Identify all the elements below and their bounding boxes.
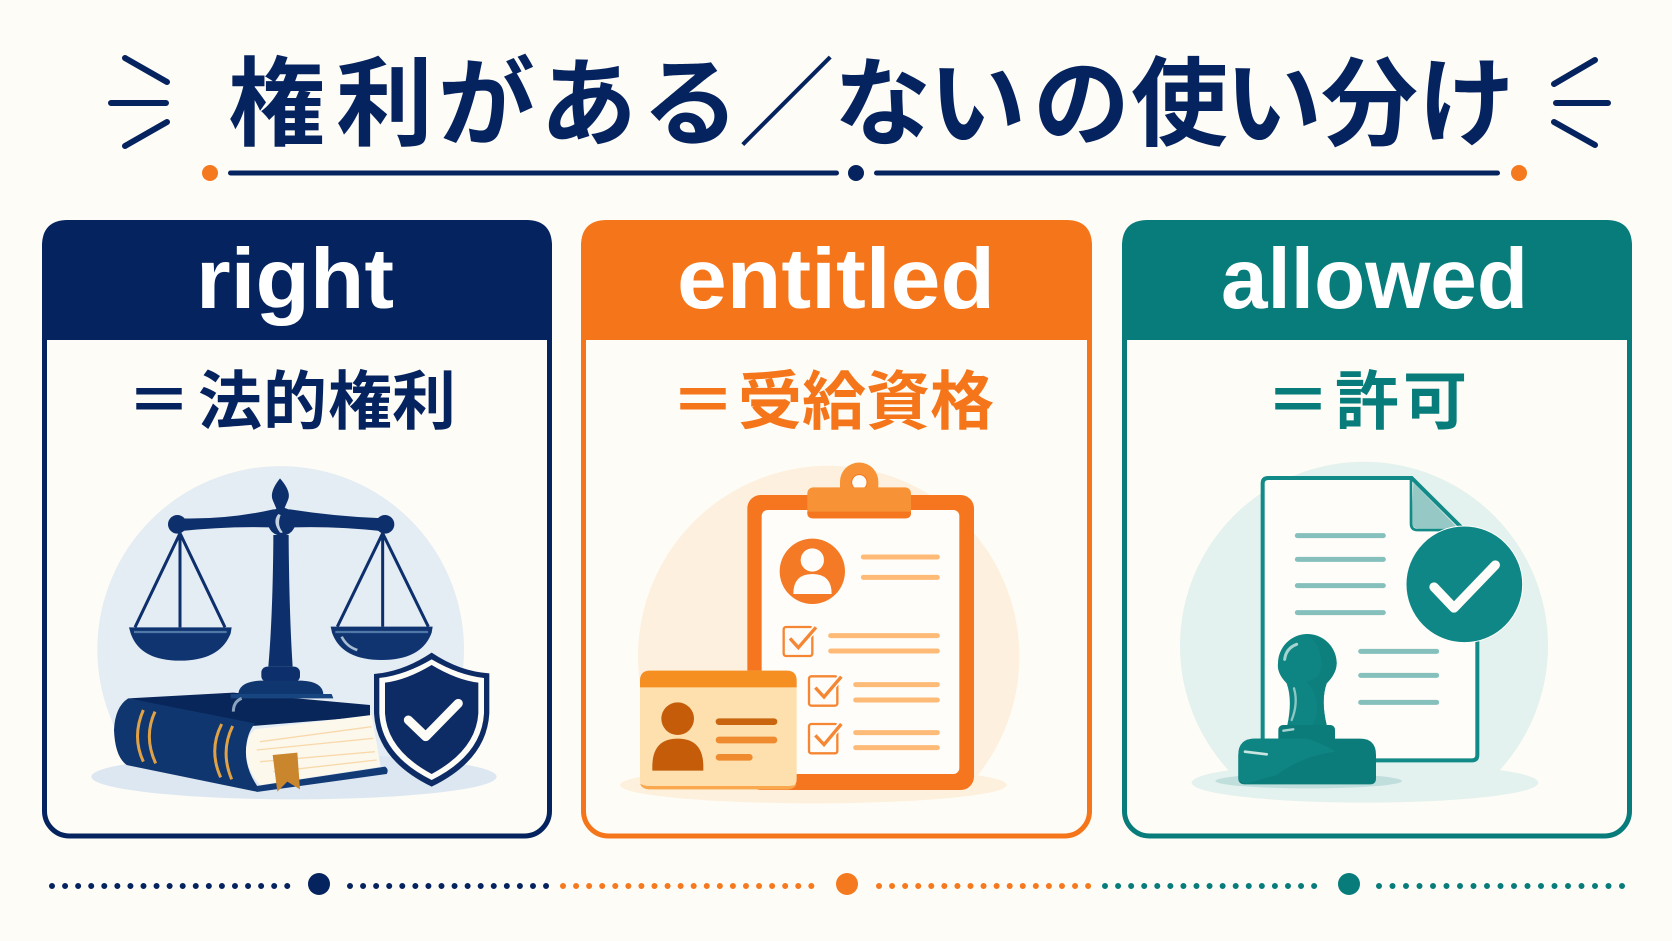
panel: right bbox=[42, 220, 552, 836]
subheading: 法的権利: ＝法的権利 bbox=[127, 351, 456, 443]
illustration: scales, law book and shield bbox=[91, 466, 497, 799]
footer marker: teal bbox=[1338, 873, 1360, 895]
illustration: clipboard and ID card bbox=[620, 463, 1019, 803]
subheading: 許可: ＝許可 bbox=[1266, 351, 1467, 443]
subheading: 受給資格: ＝受給資格 bbox=[671, 351, 994, 443]
heading: allowed: allowed bbox=[1221, 232, 1528, 327]
panel header: entitled bbox=[581, 220, 1092, 340]
footer marker: orange bbox=[836, 873, 858, 895]
heading: entitled: entitled bbox=[677, 232, 995, 327]
left title accent lines bbox=[111, 58, 167, 146]
panel header: right bbox=[42, 220, 552, 340]
illustration: approved document and stamp bbox=[1180, 462, 1548, 803]
footer dotted divider bbox=[52, 873, 1623, 895]
panel: entitled bbox=[581, 220, 1092, 836]
title underline bbox=[202, 165, 1527, 181]
right title accent lines bbox=[1554, 60, 1608, 145]
panel: allowed bbox=[1122, 220, 1632, 836]
panel header: allowed bbox=[1122, 220, 1632, 340]
heading: right: right bbox=[196, 232, 394, 327]
title: 権利がある／ないの使い分け bbox=[228, 25, 1515, 166]
footer marker: navy bbox=[308, 873, 330, 895]
